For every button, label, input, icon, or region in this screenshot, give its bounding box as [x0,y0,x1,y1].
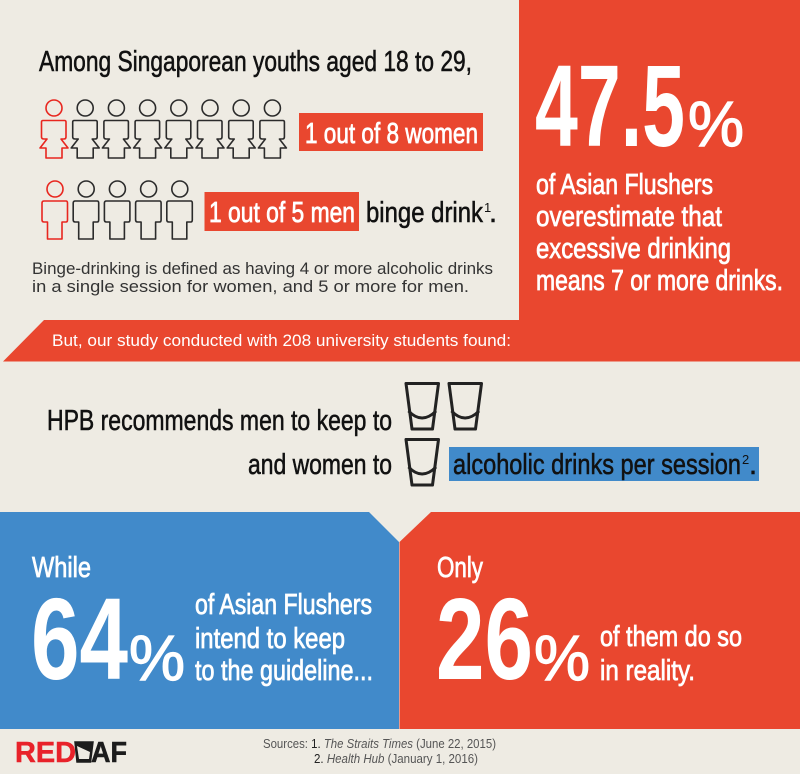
statistic: 26%: % [534,622,590,694]
logo: RED AF: AF [91,737,127,769]
label: 1 out of 8 women: 1 out of 8 women [305,118,478,150]
label: 1 out of 5 men [204,192,359,231]
label: alcoholic drinks per session: alcoholic drinks per session [453,449,741,481]
text: intend to keep: intend to keep [195,623,345,655]
label: 1 out of 5 men: 1 out of 5 men [209,197,355,229]
definition text: Binge-drinking is defined as having 4 or more alcoholic drinks [32,260,493,278]
heading: While: While [32,552,91,584]
statistic: 64%: 64 [31,574,128,704]
statistic: 26%: 26 [436,574,533,704]
sources: 2. Health Hub (January 1, 2016) [314,751,478,766]
text: in reality: in reality. [600,655,695,687]
icon: shot glass [449,384,482,429]
definition text [32,260,493,296]
icon: shot glass [406,384,438,429]
text: intend to keep [195,589,373,687]
icon row: men, 1 of 5 highlighted [42,181,192,239]
statistic description [536,169,783,297]
panel: red reality [400,512,800,729]
statistic: 47.5%: 47.5 [535,41,685,171]
title: Among Singaporean youths aged 18 to 29, [39,46,472,78]
definition text: in a single session for women, and 5 or more for men. [32,278,469,296]
text: in reality: of them do so [600,621,742,653]
statistic description: of Asian Flushers [536,169,713,201]
panel: blue intention [0,512,399,729]
recommendation: men: HPB recommends men to keep to [47,405,392,437]
logo: RED AF [15,737,127,769]
statistic: 47.5%: % [688,88,744,160]
icon row: women, 1 of 8 highlighted [40,100,286,158]
text: binge drink: . [489,197,497,229]
text: binge drink: binge drink [366,197,483,229]
sources: Sources: 1. The Straits Times (June 22, 2015) [263,736,496,751]
label: alcoholic drinks per session: . [749,449,757,481]
sources [263,736,496,766]
icon: shot glass [406,440,438,485]
statistic description: overestimate that [536,201,722,233]
label: 1 out of 8 women [299,113,483,151]
statistic description: excessive drinking [536,233,731,265]
logo: RED AF: RED [15,737,76,769]
text: binge drink: 1 [484,200,491,215]
label: alcoholic drinks per session: 2 [742,452,749,467]
heading: Only: Only [437,552,483,584]
text: intend to keep: of Asian Flushers [195,589,372,621]
panel: red statistic and banner [3,0,800,362]
text: intend to keep: to the guideline... [195,655,373,687]
recommendation: women: and women to [248,449,392,481]
text: in reality [600,621,742,687]
banner text: But, our study conducted with 208 university students found: [52,331,511,350]
statistic: 64%: % [129,622,185,694]
